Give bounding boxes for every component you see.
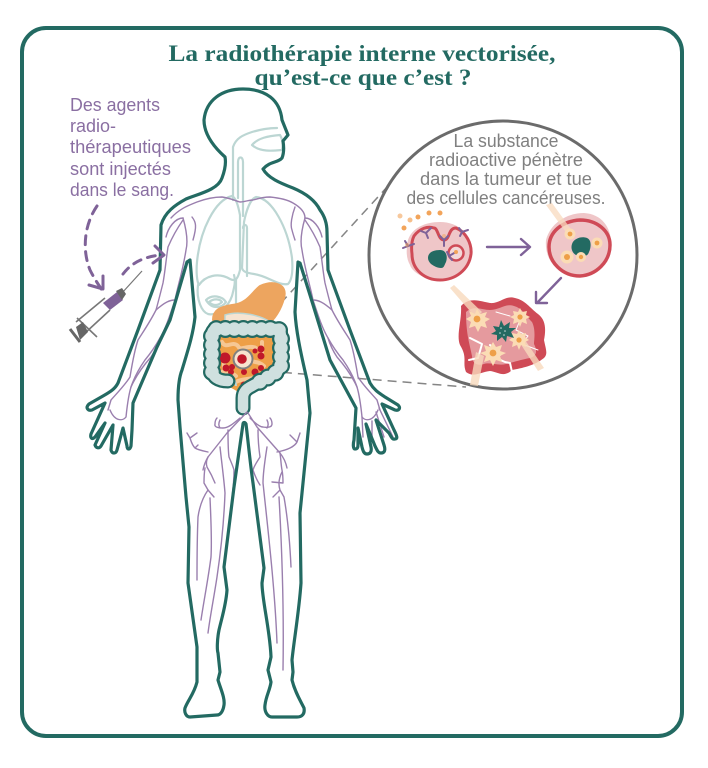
icon: syringe <box>70 271 142 342</box>
radioactive particles <box>398 210 458 254</box>
text: injection explanation: radio- <box>70 116 116 136</box>
organ: stomach <box>213 283 285 325</box>
dying nucleus <box>491 320 516 342</box>
text: injection explanation: Des agents <box>70 95 160 115</box>
arrow: dashed curve to syringe <box>85 206 103 290</box>
nucleus <box>571 237 591 256</box>
intestine folds <box>222 342 264 382</box>
title <box>168 41 556 90</box>
radioactive particles <box>560 228 602 264</box>
title: La radiothérapie interne vectorisée, <box>168 41 556 66</box>
organ: pancreas <box>225 313 270 327</box>
text: radioactive substance explanation: radioactive pénètre <box>429 150 583 170</box>
tumours <box>220 346 264 388</box>
zoomed tumour detail <box>234 350 252 368</box>
text: radioactive substance explanation <box>406 131 606 208</box>
organs: lungs and airways <box>197 128 292 314</box>
cracks <box>469 312 538 372</box>
veins: left arm <box>108 218 187 420</box>
beam <box>546 203 573 235</box>
veins: shoulders <box>171 197 305 240</box>
burst particles <box>466 308 530 366</box>
text: injection explanation <box>70 95 191 200</box>
organ: colon <box>212 329 281 408</box>
veins: legs <box>187 412 300 670</box>
arrow: dashed curve to arm <box>123 246 164 274</box>
cell 3: destroyed cancer cell <box>450 285 546 386</box>
organ: small intestine with tumours <box>216 333 275 394</box>
cell 1: agents binding <box>398 210 472 280</box>
cell 2: substance inside <box>546 203 611 276</box>
text: injection explanation: thérapeutiques <box>70 137 191 157</box>
text: injection explanation: dans le sang. <box>70 180 174 200</box>
body outline <box>87 89 399 717</box>
nucleus <box>428 250 447 268</box>
arrow: step 1 to 2 <box>487 239 530 255</box>
veins: right arm <box>301 218 393 441</box>
text: radioactive substance explanation: La substance <box>454 131 558 151</box>
panel: magnifier circle <box>369 121 637 389</box>
arrow: step 2 to 3 <box>536 278 561 303</box>
title: qu’est-ce que c’est ? <box>254 65 472 90</box>
receptors <box>403 228 468 260</box>
text: radioactive substance explanation: des cellules cancéreuses. <box>406 188 606 208</box>
text: injection explanation: sont injectés <box>70 159 171 179</box>
dashed zoom lines <box>247 186 466 387</box>
beams <box>450 285 544 386</box>
text: radioactive substance explanation: dans la tumeur et tue <box>420 169 592 189</box>
